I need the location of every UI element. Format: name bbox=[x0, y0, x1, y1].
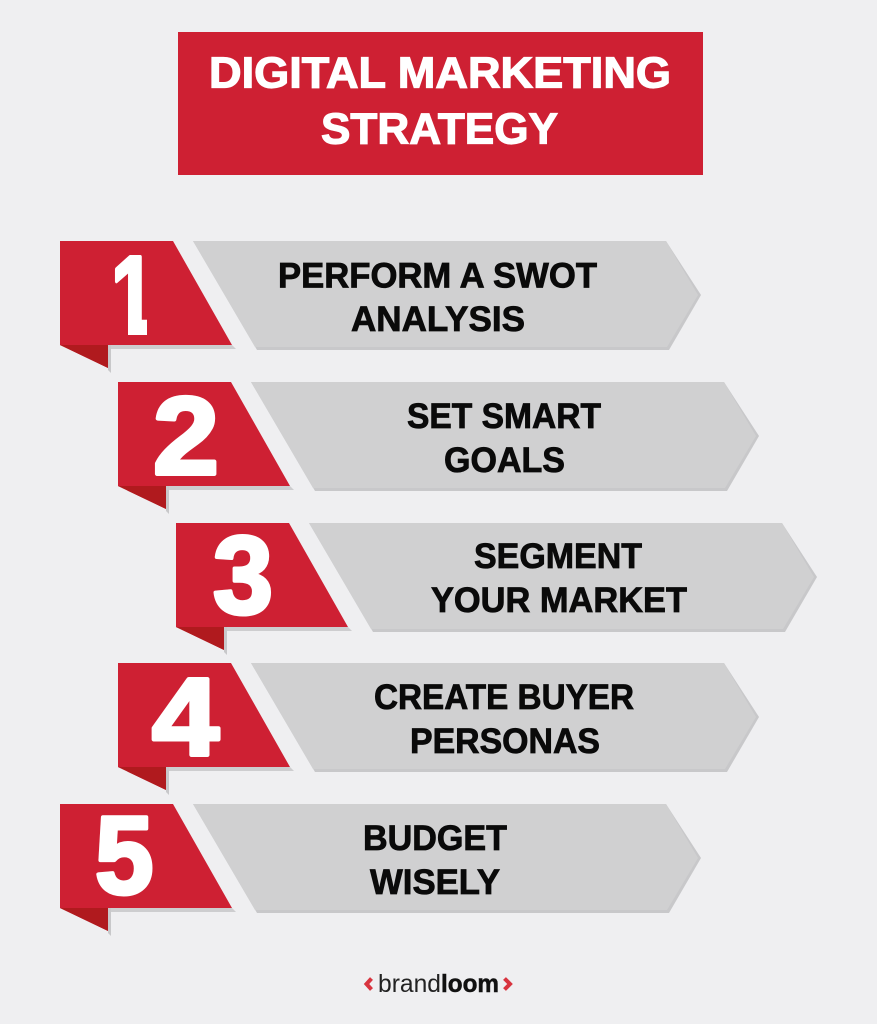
step 2 bbox=[118, 375, 759, 514]
step 1 label: ANALYSIS bbox=[351, 300, 525, 339]
step 4 red tab: 4 bbox=[152, 656, 219, 779]
step 2 red tab: 2 bbox=[153, 375, 219, 498]
step 3 label bbox=[431, 537, 687, 620]
step 1 red tab: 1 bbox=[111, 234, 155, 357]
step 3 red tab bbox=[176, 514, 352, 655]
step 3 arrow bbox=[309, 523, 817, 632]
title banner: DIGITAL MARKETING bbox=[209, 48, 671, 98]
brandloom logo bbox=[366, 970, 510, 998]
step 1 label bbox=[278, 256, 597, 339]
step 2 red tab bbox=[118, 375, 294, 514]
step 1 arrow bbox=[193, 241, 701, 350]
step 3 red tab: 3 bbox=[213, 514, 273, 638]
step 5 label bbox=[363, 819, 507, 902]
title banner: STRATEGY bbox=[321, 104, 558, 154]
brandloom logo: loom bbox=[441, 970, 499, 998]
step 2 label bbox=[407, 397, 601, 480]
step 3 bbox=[176, 514, 817, 655]
step 5 label: WISELY bbox=[370, 863, 500, 902]
step 5 arrow bbox=[193, 804, 701, 913]
brandloom logo: brand bbox=[378, 970, 441, 998]
step 4 red tab bbox=[118, 656, 294, 795]
step 5 red tab: 5 bbox=[95, 794, 154, 918]
step 5 bbox=[60, 794, 701, 936]
step 2 label: SET SMART bbox=[407, 397, 601, 436]
step 2 label: GOALS bbox=[444, 441, 565, 480]
title banner bbox=[178, 32, 703, 175]
step 4 label: CREATE BUYER bbox=[374, 678, 634, 717]
step 1 bbox=[60, 234, 701, 373]
step 4 label: PERSONAS bbox=[410, 722, 600, 761]
step 3 label: SEGMENT bbox=[474, 537, 642, 576]
step 4 arrow bbox=[251, 663, 759, 772]
step 1 red tab bbox=[60, 234, 236, 373]
step 2 arrow bbox=[251, 382, 759, 491]
step 1 label: PERFORM A SWOT bbox=[278, 256, 597, 296]
step 5 red tab bbox=[60, 794, 236, 936]
step 4 label bbox=[374, 678, 634, 761]
step 5 label: BUDGET bbox=[363, 819, 507, 858]
step 3 label: YOUR MARKET bbox=[431, 581, 687, 620]
step 4 bbox=[118, 656, 759, 795]
